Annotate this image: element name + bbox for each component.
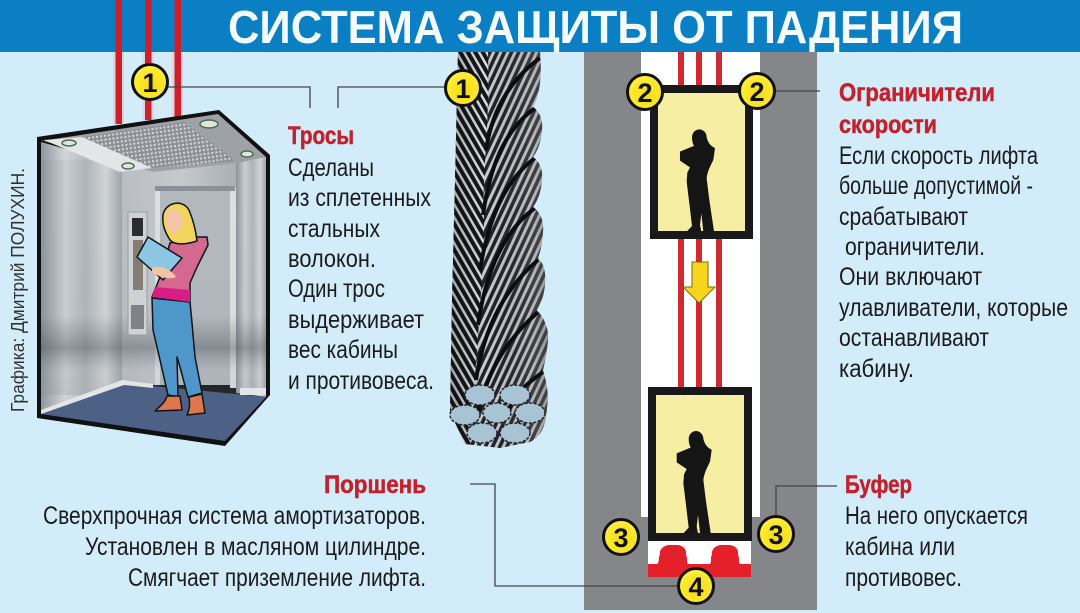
down arrow	[683, 262, 715, 303]
body: Буфер: противовес.	[845, 564, 962, 592]
body: Поршень: Смягчает приземление лифта.	[128, 564, 426, 592]
badge 1 on rope	[446, 70, 480, 106]
upper silhouette	[680, 129, 715, 232]
badge 4	[678, 568, 714, 604]
body: Ограничители скорости: ограничители.	[845, 233, 985, 261]
pink top	[152, 237, 208, 302]
badge 1 on cables: 1	[142, 68, 158, 98]
badges 2	[628, 74, 774, 110]
lower silhouette	[677, 431, 712, 533]
body: Поршень: Установлен в масляном цилиндре.	[85, 533, 426, 561]
title: СИСТЕМА ЗАЩИТЫ ОТ ПАДЕНИЯ	[228, 1, 963, 53]
rope right strands	[450, 52, 548, 448]
magenta band	[152, 287, 190, 302]
door	[155, 186, 236, 388]
title banner	[0, 0, 1080, 53]
jeans	[152, 298, 202, 397]
text: Ограничители скорости	[839, 79, 1068, 383]
lower cabin	[652, 391, 748, 537]
badges 3: 3	[768, 520, 784, 550]
control panel	[128, 212, 147, 335]
text: Тросы	[288, 122, 434, 395]
back wall	[122, 160, 240, 385]
badge 1 on cables	[132, 64, 168, 100]
leader line: cables to Тросы	[168, 87, 310, 108]
hand	[152, 267, 176, 278]
wall shading	[41, 160, 266, 395]
body: Поршень	[43, 502, 426, 592]
rope cut end	[450, 385, 545, 443]
body: Тросы: волокон.	[288, 245, 376, 273]
body: Буфер: кабина или	[845, 533, 955, 561]
elevator shaft diagram	[584, 52, 817, 610]
badge 4: 4	[688, 572, 704, 602]
credit: Графика: Дмитрий ПОЛУХИН.	[8, 168, 28, 412]
leader line: piston	[470, 484, 677, 586]
leader line: speed limiter	[776, 90, 820, 92]
text: Буфер	[845, 471, 1028, 592]
floor	[41, 380, 266, 441]
body: Тросы: Один трос	[288, 275, 385, 303]
cabin frame	[37, 110, 270, 446]
body: Ограничители скорости: кабину.	[839, 355, 914, 383]
shaft walls	[584, 52, 817, 610]
body: Тросы: Сделаны	[288, 154, 374, 182]
badges 2: 2	[637, 78, 653, 108]
body: Тросы	[288, 154, 434, 395]
rope left strands	[450, 52, 488, 445]
upper cabin	[654, 89, 749, 235]
leader line: buffer	[776, 486, 837, 516]
body: Буфер	[845, 502, 1028, 592]
right wall	[236, 157, 266, 397]
body: Тросы: стальных	[288, 215, 380, 243]
body: Тросы: из сплетенных	[288, 184, 431, 212]
cables above cabin	[113, 0, 183, 124]
ceiling	[41, 114, 266, 172]
badges 3: 3	[613, 523, 629, 553]
badges 2: 2	[749, 77, 765, 107]
shoes	[155, 394, 205, 415]
rope strand boundaries	[476, 58, 543, 420]
leader line: rope to Тросы	[338, 87, 446, 108]
steel rope	[449, 52, 548, 448]
red buffers	[648, 545, 751, 577]
face	[166, 209, 183, 233]
badge 1 on rope: 1	[455, 74, 471, 104]
shaft cables	[678, 52, 722, 388]
book	[137, 237, 182, 280]
body: Тросы: выдерживает	[288, 306, 424, 334]
body: Буфер: На него опускается	[845, 502, 1028, 530]
woman	[137, 203, 208, 415]
body: Тросы: вес кабины	[288, 336, 398, 364]
heading: Буфер: Буфер	[845, 471, 912, 499]
body: Тросы: и противовеса.	[288, 367, 434, 395]
heading: Ограничители скорости	[839, 79, 995, 139]
body: Ограничители скорости: Если скорость лифта	[839, 142, 1038, 170]
heading: Ограничители скорости: скорости	[839, 111, 937, 139]
heading: Поршень: Поршень	[324, 471, 426, 499]
body: Ограничители скорости: срабатывают	[839, 203, 968, 231]
text: Поршень	[43, 471, 426, 592]
body: Ограничители скорости	[839, 142, 1068, 383]
heading: Тросы: Тросы	[288, 122, 354, 150]
elevator cabin illustration	[37, 110, 270, 446]
body: Поршень: Сверхпрочная система амортизаторов.	[43, 502, 426, 530]
badges 3	[604, 516, 794, 554]
shaft opening	[641, 52, 760, 577]
hair	[163, 203, 197, 244]
body: Ограничители скорости: останавливают	[839, 324, 989, 352]
body: Ограничители скорости: Они включают	[839, 263, 982, 291]
heading: Ограничители скорости: Ограничители	[839, 79, 995, 107]
rope shading	[450, 50, 550, 450]
left wall	[41, 142, 122, 412]
